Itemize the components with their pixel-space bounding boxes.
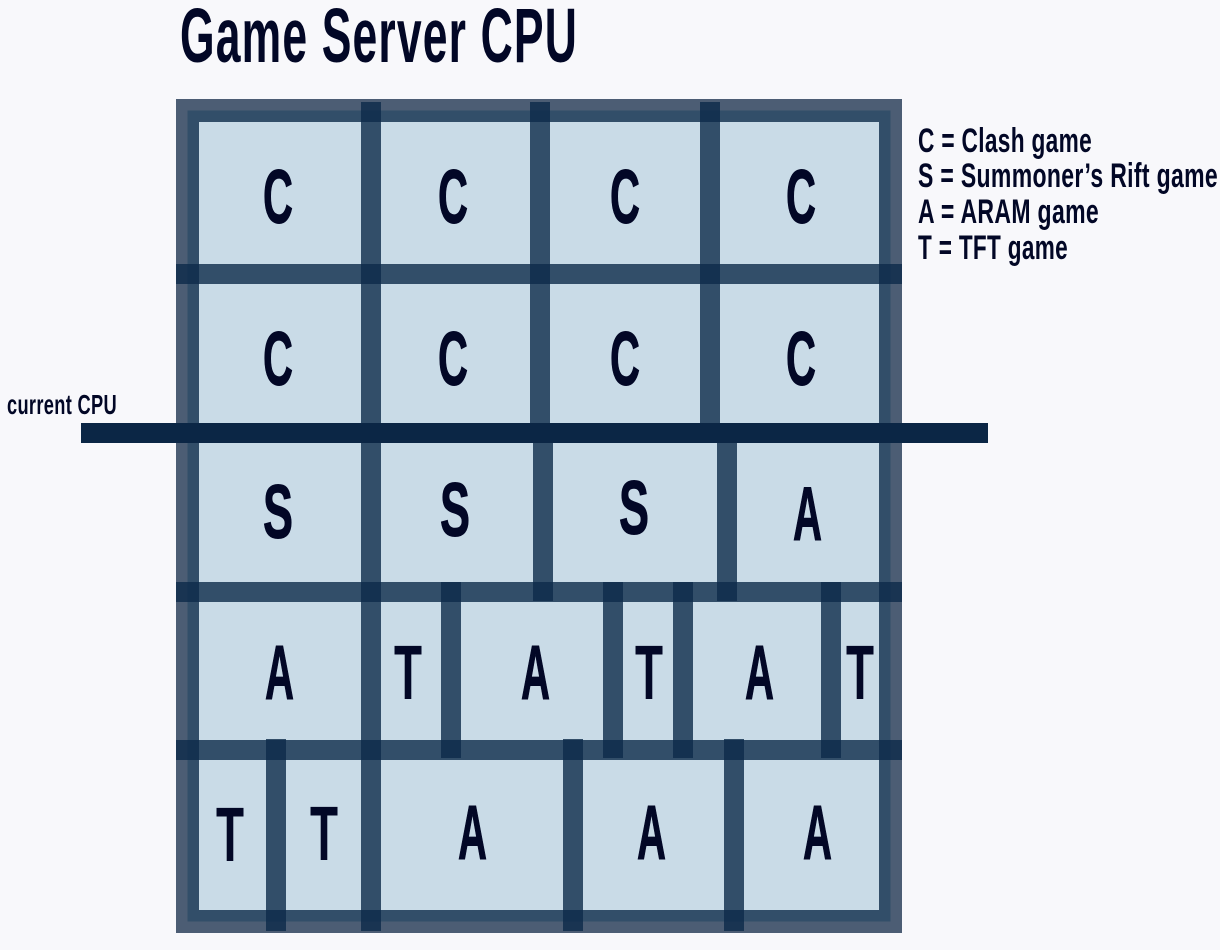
row 5: TFT and ARAM games: A (458, 790, 487, 876)
panel: CPU grid (176, 99, 902, 933)
row 4: ARAM and TFT games (265, 630, 874, 716)
current CPU line (81, 423, 988, 443)
legend: C = Clash game (918, 122, 1092, 160)
row 5: TFT and ARAM games: T (216, 792, 244, 878)
current CPU label: current CPU (7, 389, 117, 420)
row 1: Clash games: C (786, 155, 816, 240)
row 5: TFT and ARAM games: A (803, 790, 832, 876)
row 1: Clash games: C (263, 155, 293, 240)
row 3: Summoner's Rift and ARAM games: S (440, 468, 470, 553)
row 2: Clash games: C (438, 317, 468, 402)
row 4: ARAM and TFT games: T (394, 630, 422, 716)
row 2: Clash games: C (786, 317, 816, 402)
row 5: TFT and ARAM games: A (637, 790, 666, 876)
row 1: Clash games (263, 155, 816, 240)
row 2: Clash games: C (263, 317, 293, 402)
row 3: Summoner's Rift and ARAM games: S (263, 470, 293, 555)
row 4: ARAM and TFT games: A (265, 630, 294, 716)
legend: A = ARAM game (918, 193, 1099, 231)
grid dividers (176, 102, 902, 931)
legend (918, 122, 1218, 267)
row 4: ARAM and TFT games: T (635, 630, 663, 716)
row 5: TFT and ARAM games (216, 790, 832, 878)
row 4: ARAM and TFT games: A (521, 630, 550, 716)
row 4: ARAM and TFT games: T (846, 630, 874, 716)
row 3: Summoner's Rift and ARAM games: A (793, 472, 822, 557)
grid frame (176, 99, 902, 933)
row 1: Clash games: C (610, 155, 640, 240)
row 4: ARAM and TFT games: A (745, 630, 774, 716)
row 2: Clash games: C (610, 317, 640, 402)
legend: T = TFT game (918, 229, 1068, 267)
row 1: Clash games: C (438, 155, 468, 240)
row 2: Clash games (263, 317, 816, 402)
row 3: Summoner's Rift and ARAM games: S (619, 466, 649, 551)
row 5: TFT and ARAM games: T (310, 791, 338, 877)
row 3: Summoner's Rift and ARAM games (263, 466, 822, 557)
